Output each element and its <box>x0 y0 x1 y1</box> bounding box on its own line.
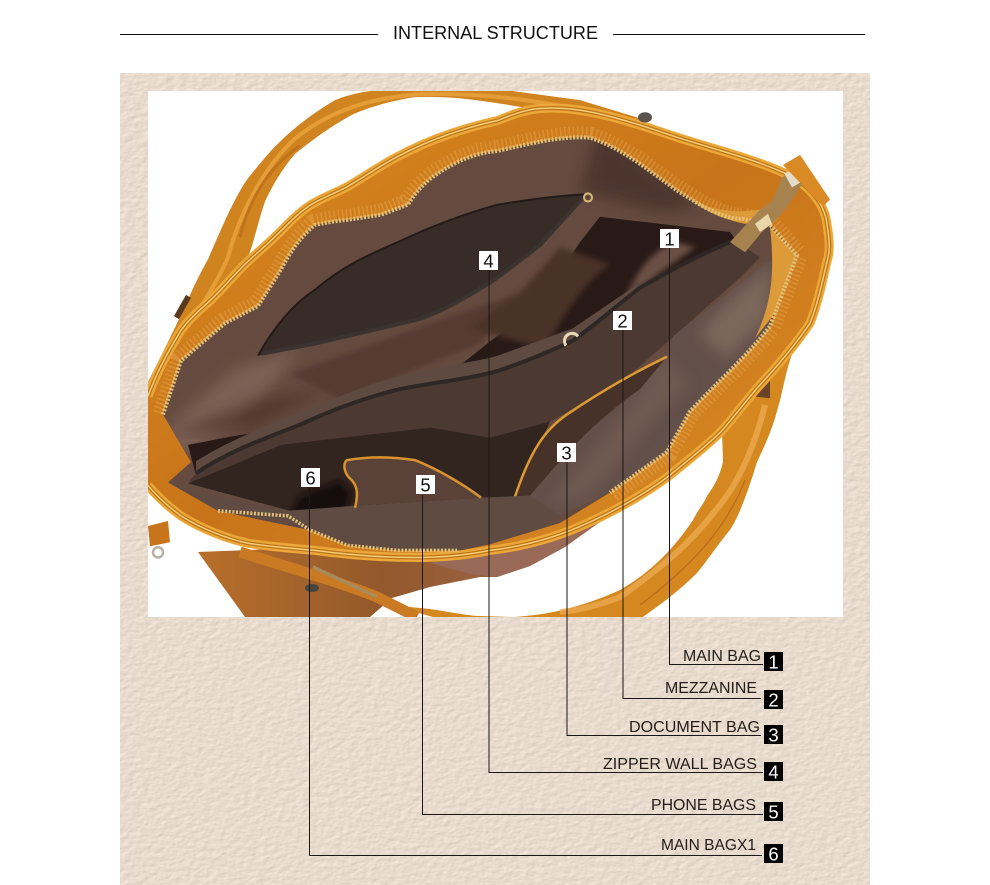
mezzanine pull <box>564 333 578 346</box>
front strap with buckle <box>240 552 417 617</box>
panel: paper background <box>120 73 870 885</box>
callout 1: MAIN BAG: MAIN BAG <box>683 648 761 665</box>
zipper teeth <box>163 137 797 493</box>
zipper wall pocket back <box>258 194 584 356</box>
orange zipper tape <box>691 199 760 224</box>
callout 5: PHONE BAGS: PHONE BAGS <box>651 797 756 814</box>
callout 3: DOCUMENT BAG: 3 <box>768 724 779 746</box>
back handle <box>148 88 662 396</box>
top rivet <box>638 112 652 122</box>
callout 2: MEZZANINE: 2 <box>617 310 628 332</box>
callout 4: ZIPPER WALL BAGS: ZIPPER WALL BAGS <box>603 756 757 773</box>
left side buckle <box>148 521 170 557</box>
callout 4: ZIPPER WALL BAGS: 4 <box>483 250 494 272</box>
upper right shadow of lining <box>580 138 694 214</box>
front handle <box>408 355 792 617</box>
side tab <box>756 380 770 398</box>
callout 1: MAIN BAG: 1 <box>768 652 779 672</box>
outer bag body below rim <box>198 520 600 617</box>
callout 5: PHONE BAGS: 5 <box>768 802 779 822</box>
front lining <box>168 482 560 556</box>
callout 1: MAIN BAG <box>660 228 783 672</box>
metal zipper slider <box>730 176 802 252</box>
callout 3: DOCUMENT BAG <box>557 442 783 746</box>
document pocket <box>513 357 667 501</box>
phone pocket <box>345 457 481 506</box>
callout 4: ZIPPER WALL BAGS: 4 <box>768 762 779 782</box>
photo: open handbag interior <box>148 88 830 619</box>
callout 6: MAIN BAGX1 <box>301 468 783 864</box>
lining <box>163 137 797 550</box>
mezzanine panel <box>188 240 760 483</box>
callout 5: PHONE BAGS: 5 <box>420 474 431 496</box>
callout 5: PHONE BAGS <box>416 474 783 822</box>
callout 3: DOCUMENT BAG: DOCUMENT BAG <box>629 719 760 736</box>
callout 6: MAIN BAGX1: MAIN BAGX1 <box>661 837 756 854</box>
callout 2: MEZZANINE <box>613 310 783 710</box>
callout 2: MEZZANINE: MEZZANINE <box>665 680 757 697</box>
zipper pull <box>584 193 592 202</box>
callout 6: MAIN BAGX1: 6 <box>768 844 779 864</box>
corner strap tab <box>783 155 830 207</box>
satin folds <box>169 352 292 454</box>
satin right side <box>530 260 772 516</box>
corrugated zipper band <box>163 137 797 493</box>
callout 1: MAIN BAG: 1 <box>664 228 675 250</box>
callout 6: MAIN BAGX1: 6 <box>305 468 316 488</box>
callout 2: MEZZANINE: 2 <box>768 690 779 710</box>
rim leather <box>148 108 829 557</box>
panel: photo backdrop <box>148 91 843 617</box>
middle dark cavity <box>188 217 745 475</box>
title: INTERNAL STRUCTURE <box>393 23 598 43</box>
callout 3: DOCUMENT BAG: 3 <box>561 442 572 464</box>
bottom dark compartment <box>188 422 550 516</box>
callout 4: ZIPPER WALL BAGS <box>479 250 783 782</box>
